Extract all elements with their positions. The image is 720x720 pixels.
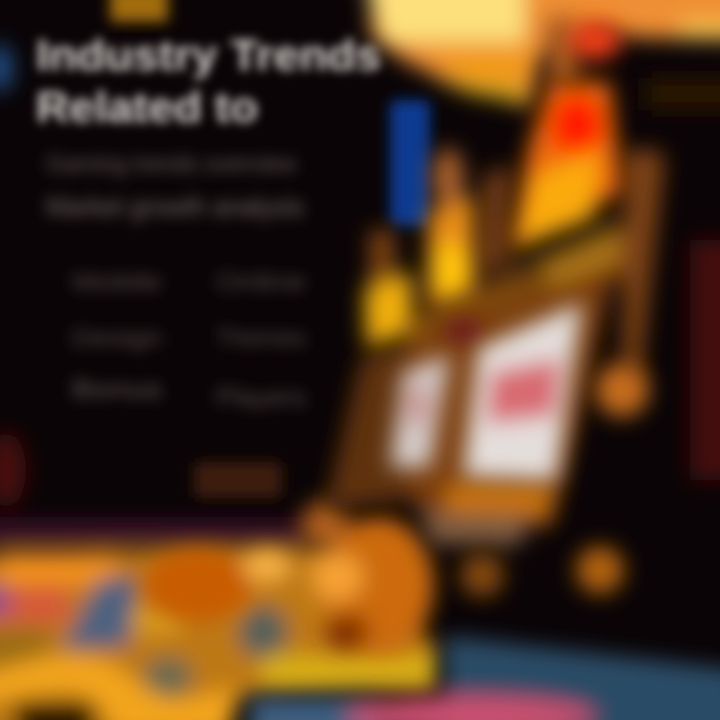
reel windows (390, 302, 582, 480)
list columns (72, 269, 306, 412)
list columns: Mobile (72, 269, 162, 296)
coins (460, 363, 649, 597)
list columns: Bonus (72, 374, 162, 404)
list columns: Online (216, 269, 306, 296)
machine frame (325, 18, 665, 546)
yellow lights (364, 148, 476, 348)
heading (36, 31, 381, 132)
left edge accents (0, 44, 720, 508)
bottom right floor (250, 636, 720, 720)
slot machine (325, 18, 665, 597)
heading: Industry Trends (36, 31, 381, 80)
top right glow (360, 0, 720, 108)
blue panel (390, 100, 430, 226)
machine top panel (510, 20, 622, 252)
heading: Related to (36, 83, 258, 132)
floor carpet (0, 524, 440, 720)
list columns: Players (216, 382, 306, 412)
coin pile (144, 501, 434, 653)
intro text block: Gaming trends overview (46, 151, 297, 178)
list columns: Themes (216, 325, 306, 352)
button (194, 462, 282, 498)
intro text block (46, 151, 304, 222)
intro text block: Market growth analysis (46, 191, 304, 222)
top lamp (110, 0, 168, 22)
list columns: Design (72, 325, 162, 352)
